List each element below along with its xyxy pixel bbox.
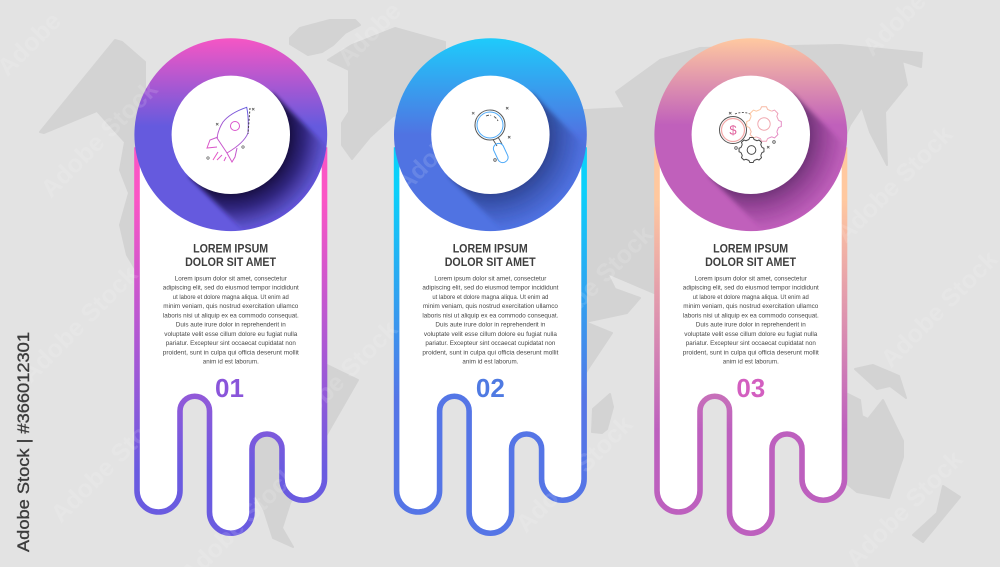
card 2 body text: adipiscing elit, sed do eiusmod tempor incididunt bbox=[422, 284, 559, 292]
card 2 heading: DOLOR SIT AMET bbox=[445, 257, 536, 269]
card 2 outline bbox=[397, 150, 584, 533]
card 1 body text: minim veniam, quis nostrud exercitation ullamco bbox=[163, 303, 299, 310]
watermarks: Adobe Stock bbox=[45, 400, 173, 528]
card 2 body text bbox=[422, 275, 559, 366]
card 1 body text bbox=[163, 275, 299, 366]
card 1 heading: DOLOR SIT AMET bbox=[185, 257, 276, 269]
watermarks: Adobe Stock bbox=[530, 220, 658, 348]
card 1 body text: voluptate velit esse cillum dolore eu fugiat nulla bbox=[164, 331, 298, 338]
card 2 body text: laboris nisi ut aliquip ex ea commodo consequat. bbox=[422, 312, 559, 319]
watermarks: Adobe Stock bbox=[875, 245, 1000, 373]
card 3 body text: anim id est laborum. bbox=[723, 358, 779, 366]
icon: magnifier bbox=[472, 107, 510, 164]
card 1 number: 01 bbox=[215, 373, 244, 403]
card 2 body text: Duis aute irure dolor in reprehenderit in bbox=[435, 322, 546, 328]
stock id label: Adobe Stock | #366012301 bbox=[14, 332, 33, 552]
card 3 gradient circle bbox=[654, 38, 847, 231]
card 3 body text: minim veniam, quis nostrud exercitation ullamco bbox=[683, 303, 819, 310]
card 3 body text: laboris nisi ut aliquip ex ea commodo consequat. bbox=[683, 312, 819, 319]
card 1 body text: proident, sunt in culpa qui officia deserunt mollit bbox=[163, 349, 299, 356]
card 1 white circle bbox=[172, 76, 290, 194]
card 3 body text: adipiscing elit, sed do eiusmod tempor incididunt bbox=[683, 284, 819, 292]
card 3 heading: LOREM IPSUM bbox=[713, 244, 788, 256]
card 1 bbox=[134, 38, 350, 533]
card 2 body text: anim id est laborum. bbox=[462, 358, 519, 366]
watermarks: Adobe Stock bbox=[510, 410, 638, 538]
card 3 heading: DOLOR SIT AMET bbox=[705, 257, 796, 269]
card 3 body text: ut labore et dolore magna aliqua. Ut enim ad bbox=[693, 294, 809, 301]
card 1 heading bbox=[185, 244, 276, 269]
card 2 body text: voluptate velit esse cillum dolore eu fugiat nulla bbox=[424, 331, 557, 338]
card 1 body text: anim id est laborum. bbox=[203, 358, 259, 366]
watermarks: Adobe Stock bbox=[15, 260, 143, 388]
watermarks: Adobe Stock bbox=[275, 315, 403, 443]
card 3 body text: Lorem ipsum dolor sit amet, consectetur bbox=[695, 275, 808, 282]
watermarks: Adobe Stock bbox=[830, 120, 958, 248]
card 1 body text: laboris nisi ut aliquip ex ea commodo consequat. bbox=[163, 312, 299, 319]
card 1 heading: LOREM IPSUM bbox=[193, 244, 268, 256]
card 3 bbox=[654, 38, 870, 533]
card 2 bbox=[394, 38, 610, 533]
card 2 body text: Lorem ipsum dolor sit amet, consectetur bbox=[434, 275, 547, 282]
card 2 white circle bbox=[431, 76, 550, 194]
card 2 number: 02 bbox=[476, 373, 505, 403]
card 3 number: 03 bbox=[736, 373, 765, 403]
card 2 heading: LOREM IPSUM bbox=[453, 244, 528, 256]
icon: rocket bbox=[207, 107, 254, 162]
card 2 body text: ut labore et dolore magna aliqua. Ut enim ad bbox=[432, 294, 549, 301]
card 1 body text: Lorem ipsum dolor sit amet, consectetur bbox=[175, 275, 288, 282]
card 2 heading bbox=[445, 244, 536, 269]
watermarks: Adobe Stock bbox=[35, 75, 163, 203]
card 3 outline bbox=[657, 150, 844, 533]
card 2 long shadow bbox=[447, 92, 580, 224]
card 3 body text: pariatur. Excepteur sint occaecat cupidatat non bbox=[686, 340, 816, 347]
card 1 outline bbox=[137, 150, 324, 533]
card 1 body text: pariatur. Excepteur sint occaecat cupidatat non bbox=[166, 340, 296, 347]
card 1 gradient circle bbox=[134, 38, 327, 231]
card 2 body text: proident, sunt in culpa qui officia deserunt mollit bbox=[422, 349, 559, 356]
icon: coin and gears bbox=[720, 106, 782, 163]
card 3 heading bbox=[705, 244, 796, 269]
card 3 white circle bbox=[692, 76, 810, 194]
card 2 body text: pariatur. Excepteur sint occaecat cupidatat non bbox=[425, 340, 556, 347]
card 2 body text: minim veniam, quis nostrud exercitation ullamco bbox=[423, 303, 558, 310]
watermarks: Adobe Stock bbox=[390, 70, 518, 198]
card 3 long shadow bbox=[708, 91, 840, 224]
card 3 body text: Duis aute irure dolor in reprehenderit in bbox=[696, 322, 806, 328]
card 1 body text: ut labore et dolore magna aliqua. Ut enim ad bbox=[173, 294, 289, 301]
card 1 body text: Duis aute irure dolor in reprehenderit in bbox=[176, 322, 286, 328]
card 3 body text: proident, sunt in culpa qui officia deserunt mollit bbox=[683, 349, 819, 356]
card 1 body text: adipiscing elit, sed do eiusmod tempor incididunt bbox=[163, 284, 299, 292]
card 3 body text bbox=[683, 275, 819, 366]
card 2 gradient circle bbox=[394, 38, 587, 231]
card 3 body text: voluptate velit esse cillum dolore eu fugiat nulla bbox=[684, 331, 818, 338]
card 1 long shadow bbox=[187, 90, 325, 229]
icon: coin and gears: $ bbox=[729, 122, 737, 138]
